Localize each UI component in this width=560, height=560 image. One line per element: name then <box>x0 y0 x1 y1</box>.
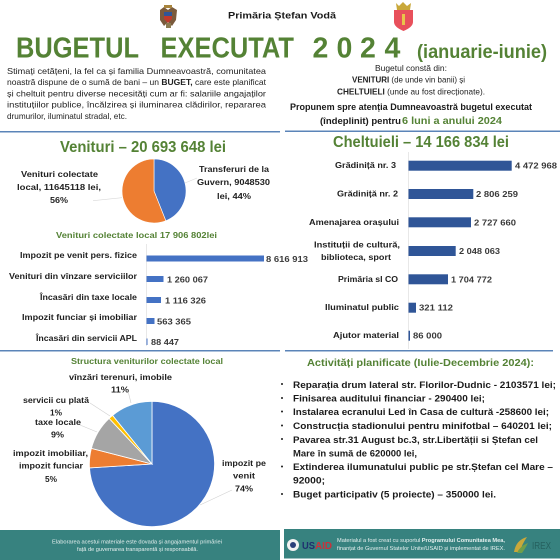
list: planned activities: Construcția stadionului pentru minifotbal – 640201 lei; <box>293 421 552 431</box>
row: town landscaping: Amenajarea orașului <box>309 218 399 227</box>
logo: USAID: AID <box>315 541 332 552</box>
label: property tax: impozit imobiliar, <box>13 449 88 458</box>
list: planned activities: Buget participativ (5 proiecte) – 350000 lei. <box>293 490 496 500</box>
heading: planned activities: Activități planificate (Iulie-Decembrie 2024): <box>307 357 534 369</box>
row: public lighting: Iluminatul public <box>325 303 400 312</box>
label: government transfers: Guvern, 9048530 <box>197 178 271 187</box>
icon: Stefan Voda emblem <box>394 2 413 31</box>
row: public lighting: 321 112 <box>419 303 453 313</box>
bar chart: expenditures <box>309 152 557 349</box>
label: government transfers: Transferuri de la <box>199 165 270 174</box>
label: local taxes: taxe locale <box>35 418 82 427</box>
icon: Moldova coat of arms <box>160 5 177 28</box>
row: kindergarten 3 <box>335 161 557 171</box>
heading: locally collected revenues: Venituri colectate local 17 906 802lei <box>56 230 217 240</box>
row: town hall: Primăria sI CO <box>338 275 398 284</box>
label: local taxes: 9% <box>51 430 64 440</box>
label: local revenues: Venituri colectate <box>21 170 99 179</box>
proposal statement: 6 luni a anului 2024 <box>402 115 502 127</box>
label: local revenues <box>17 170 101 205</box>
row: local government services: Încasări din servicii APL <box>35 334 137 343</box>
title: 2024 <box>312 32 400 64</box>
label: land sales: vînzări terenuri, imobile <box>69 373 173 382</box>
list: planned activities: Extinderea ilumunatului public pe str.Ștefan cel Mare – <box>293 462 553 472</box>
heading: expenditures: Cheltuieli – 14 166 834 lei <box>333 134 509 151</box>
footer: support statement <box>337 538 505 552</box>
logo: IREX: IREX <box>532 541 551 552</box>
list: planned activities: 92000; <box>293 476 325 486</box>
heading: structure of local revenues: Structura veniturilor colectate local <box>71 356 223 366</box>
row: property tax: 563 365 <box>157 316 191 326</box>
row: sale of services: 1 260 067 <box>167 274 208 284</box>
list: planned activities: Finisarea auditului financiar - 290400 lei; <box>293 394 485 404</box>
intro text block <box>7 66 267 121</box>
row: kindergarten 3: 4 472 968 <box>515 161 557 171</box>
row: culture, library, sport: Instituții de cultură, <box>314 240 400 250</box>
footer: support statement: finanțat de Guvernul Statelor Unite/USAID și implementat de IREX. <box>337 546 505 552</box>
row: local government services <box>35 334 179 347</box>
list: planned activities: Pavarea str.31 August bc.3, str.Libertății si Ștefan cel <box>293 435 538 445</box>
proposal statement: Propunem spre atenția Dumneavoastră bugetul executat <box>290 102 532 112</box>
pie chart: revenue sources <box>17 159 271 223</box>
row: sale of services <box>9 272 208 284</box>
list: planned activities: Reparația drum lateral str. Florilor-Dudnic - 2103571 lei; <box>293 380 556 390</box>
row: material aid: 86 000 <box>413 331 442 341</box>
intro text block: Stimați cetățeni, la fel ca și familia Dumneavoastră, comunitatea <box>7 66 266 76</box>
list: planned activities <box>281 380 556 500</box>
label: paid services: 1% <box>50 408 62 418</box>
logo: IREX <box>514 537 551 553</box>
budget explanation text: VENITURI (de unde vin banii) și <box>352 74 465 84</box>
label: local revenues: local, 11645118 lei, <box>17 183 101 192</box>
row: town hall: 1 704 772 <box>451 274 492 284</box>
row: property tax: Impozit funciar și imobiliar <box>22 313 137 322</box>
header: town hall name: Primăria Ștefan Vodă <box>228 10 337 22</box>
row: culture, library, sport: biblioteca, sport <box>321 253 391 262</box>
logo: USAID <box>287 539 332 552</box>
label: government transfers <box>197 165 271 201</box>
row: public lighting <box>325 303 453 313</box>
title: EXECUTAT <box>160 32 295 64</box>
row: local government services: 88 447 <box>151 337 179 347</box>
label: income tax <box>222 459 267 494</box>
budget explanation text <box>337 63 485 96</box>
logo: USAID: US <box>302 541 315 552</box>
row: kindergarten 2: 2 806 259 <box>476 189 518 199</box>
label: government transfers: lei, 44% <box>217 192 251 201</box>
row: material aid: Ajutor material <box>333 331 399 340</box>
row: property tax <box>22 313 191 326</box>
row: income tax: 8 616 913 <box>266 254 308 264</box>
heading: revenues: Venituri – 20 693 648 lei <box>60 139 226 156</box>
row: sale of services: Venituri din vînzare serviciilor <box>9 272 137 281</box>
row: town landscaping <box>309 217 516 227</box>
row: culture, library, sport: 2 048 063 <box>459 246 500 256</box>
label: land sales: 11% <box>111 386 129 394</box>
pie chart: structure of local revenues <box>13 373 267 527</box>
intro text block: noastră dispune de o sumă de bani – un BUGET, care este planificat <box>7 77 267 87</box>
row: material aid <box>333 331 442 341</box>
row: town hall <box>338 274 492 284</box>
label: property tax <box>13 449 88 484</box>
row: income tax: Impozit pe venit pers. fizice <box>20 251 138 260</box>
intro text block: și cheltuit pentru diverse necesități cum ar fi: salariile angajaților <box>7 88 266 98</box>
label: paid services: servicii cu plată <box>23 396 90 405</box>
row: kindergarten 2: Grădiniță nr. 2 <box>337 190 399 198</box>
list: planned activities: Instalarea ecranului Led în Casa de cultură -258600 lei; <box>293 407 549 417</box>
bar chart: locally collected revenues <box>9 244 308 347</box>
row: town landscaping: 2 727 660 <box>474 217 516 227</box>
label: local taxes <box>35 418 82 440</box>
label: property tax: 5% <box>45 475 57 484</box>
label: local revenues: 56% <box>50 196 68 205</box>
title: BUGETUL <box>16 32 139 64</box>
label: income tax: 74% <box>235 484 253 494</box>
label: land sales <box>69 373 173 394</box>
row: income tax <box>20 251 308 264</box>
proposal statement <box>290 102 532 127</box>
budget explanation text: CHELTUIELI (unde au fost direcționate). <box>337 86 485 96</box>
row: local taxes <box>39 293 206 306</box>
footer: left banner: față de guvernarea transparentă și responsabilă. <box>77 547 198 553</box>
list: planned activities: Mare în sumă de 620000 lei, <box>293 448 417 458</box>
budget explanation text: Bugetul constă din: <box>375 63 447 73</box>
intro text block: instituțiilor publice, încălzirea și iluminarea clădirilor, repararea <box>7 100 266 110</box>
label: property tax: impozit funciar <box>19 462 83 470</box>
footer: support statement: Materialul a fost creat cu suportul Programului Comunitatea Mea, <box>337 538 505 544</box>
footer: left banner: Elaborarea acestui materiale este dovada și angajamentul primăriei <box>52 540 222 546</box>
footer: right banner <box>284 529 560 558</box>
row: local taxes: 1 116 326 <box>165 296 206 306</box>
label: paid services <box>23 396 90 418</box>
row: local taxes: Încasări din taxe locale <box>39 293 138 302</box>
footer: left banner <box>0 530 280 560</box>
title <box>16 32 547 64</box>
title: (ianuarie-iunie) <box>417 41 547 63</box>
intro text block: drumurilor, iluminatul stradal, etc. <box>7 111 127 121</box>
label: income tax: impozit pe <box>222 459 267 468</box>
label: income tax: venit <box>233 472 255 480</box>
proposal statement: (îndeplinit) pentru <box>320 116 401 126</box>
row: kindergarten 3: Grădiniță nr. 3 <box>335 161 397 170</box>
row: culture, library, sport <box>314 240 500 262</box>
row: kindergarten 2 <box>337 189 518 199</box>
